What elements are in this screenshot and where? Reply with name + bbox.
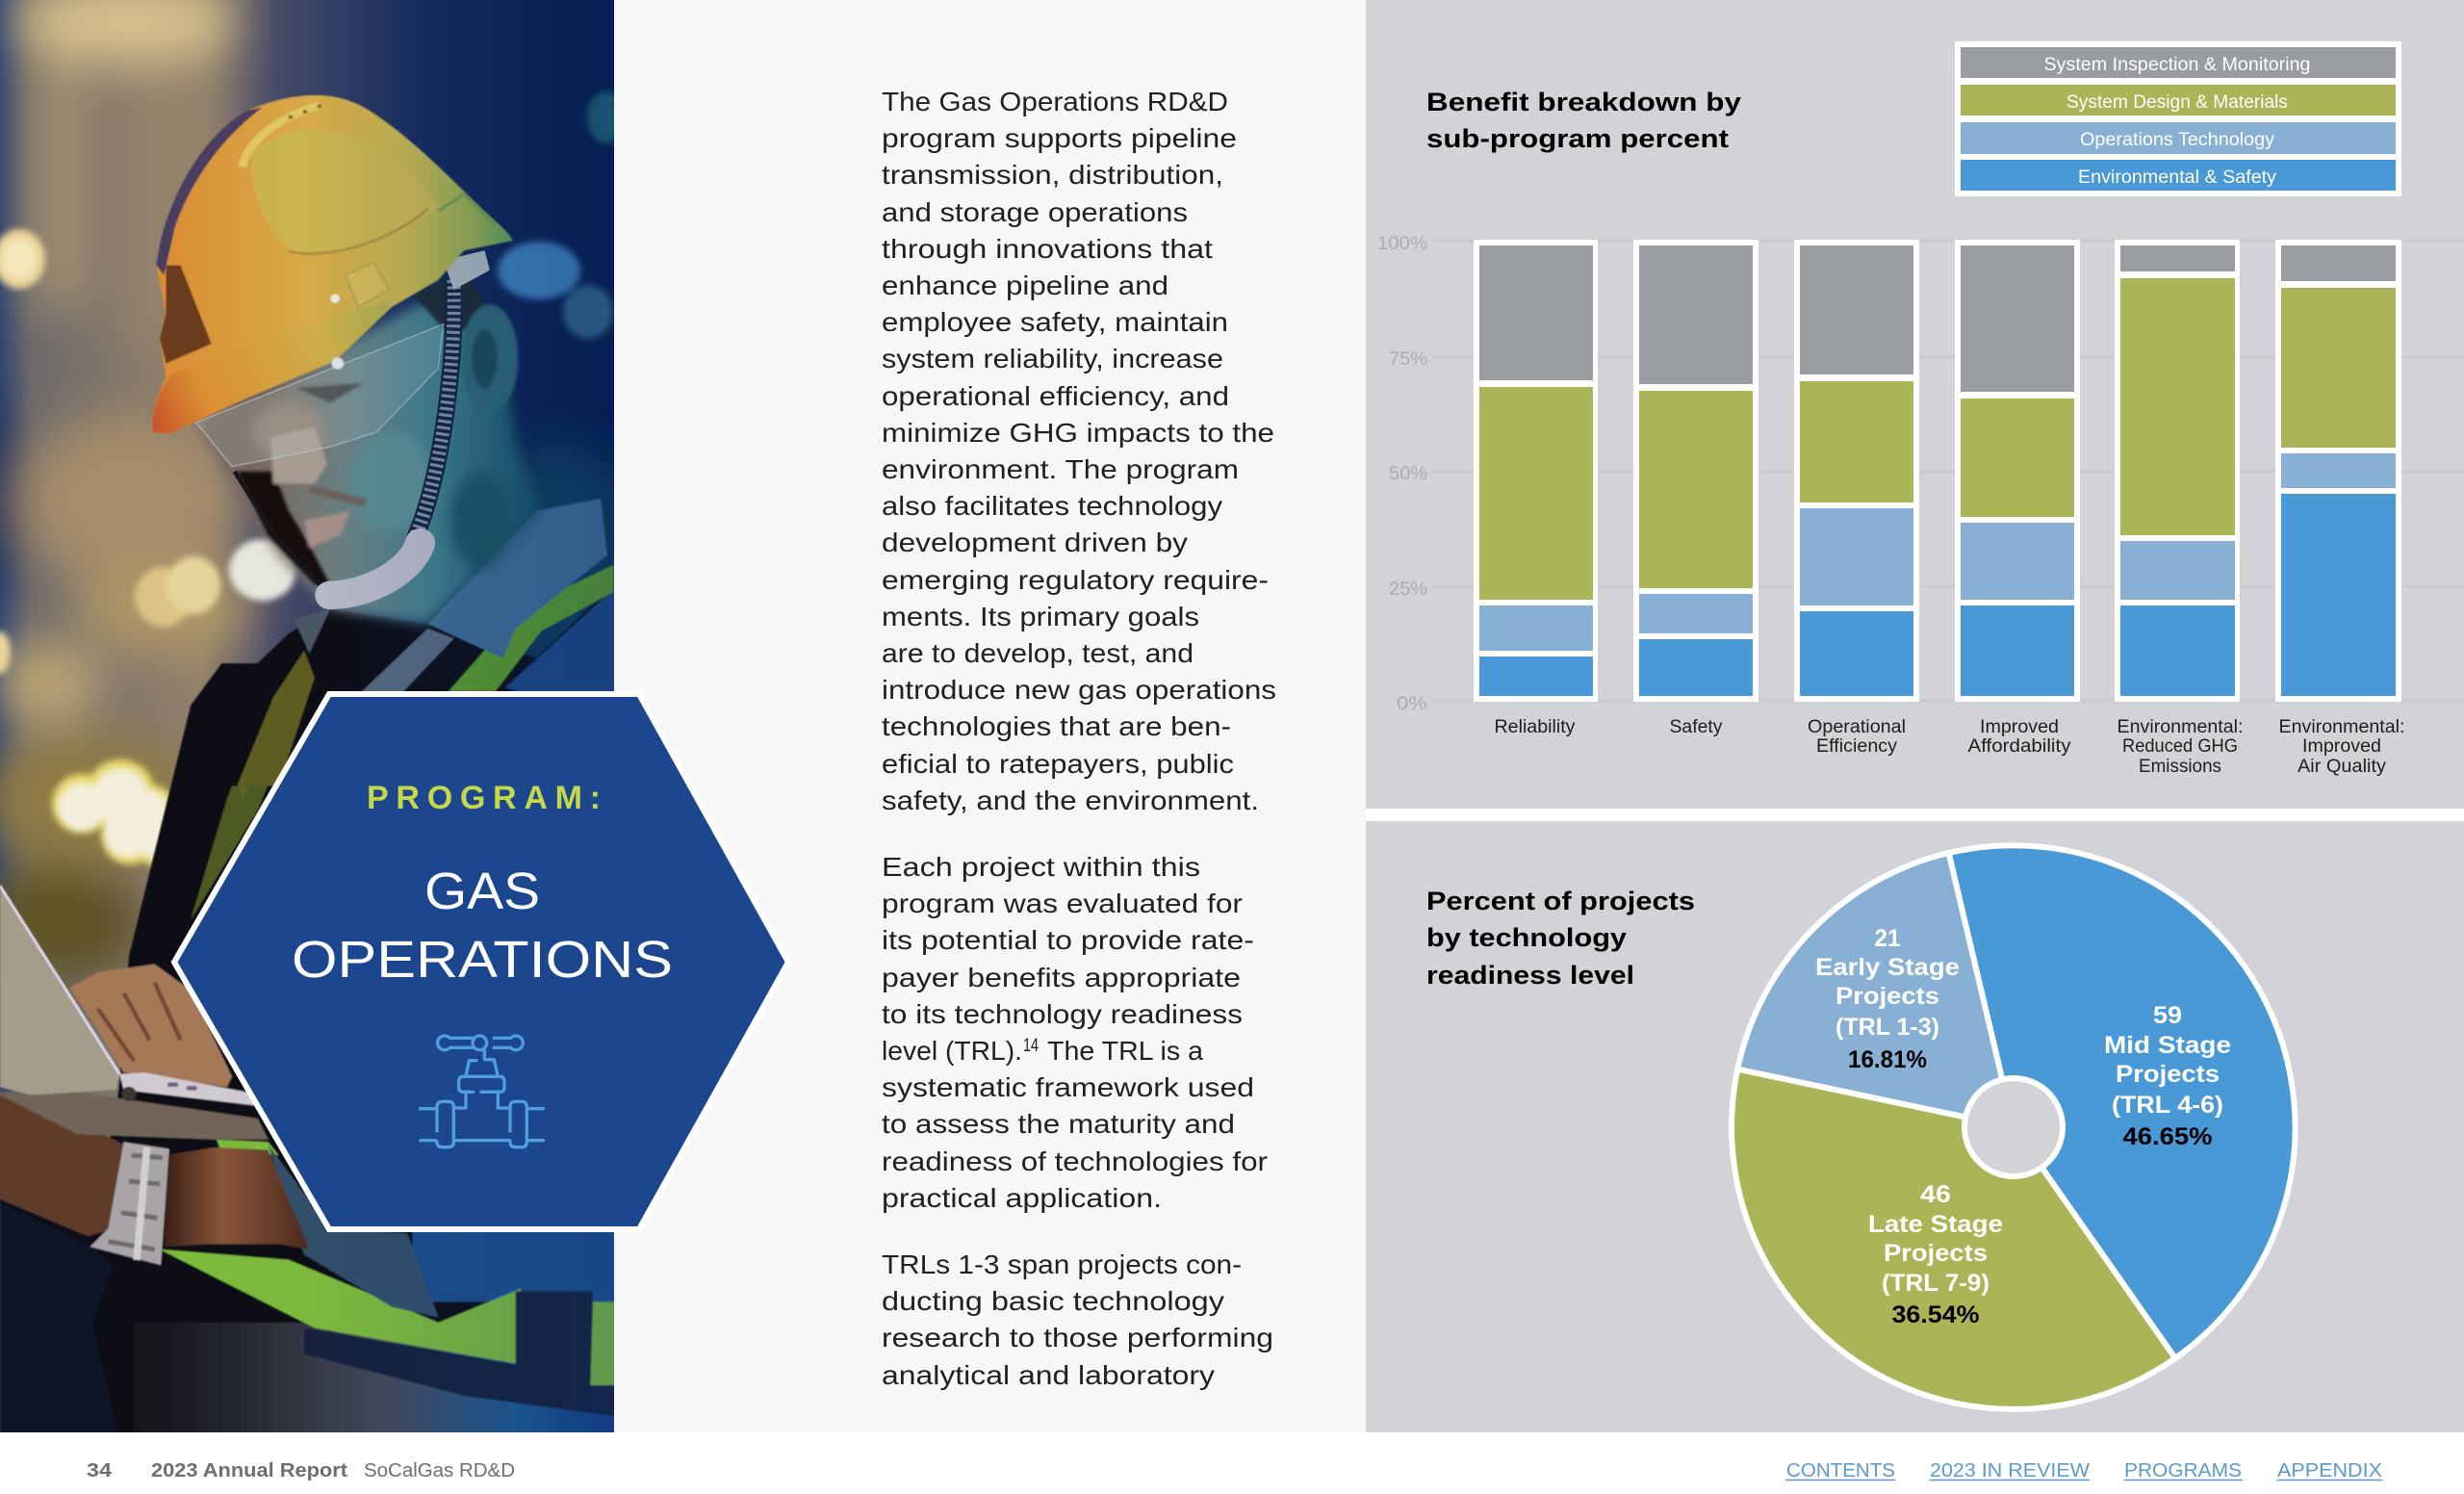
hexagon badge: program title: PROGRAM:: [367, 780, 601, 816]
body text: paragraph 1: program supports pipeline: [882, 123, 1237, 153]
body text: paragraph 2: payer benefits appropriate: [882, 963, 1241, 992]
body text: paragraph 2: to assess the maturity and: [882, 1109, 1235, 1139]
x axis labels: Reliability: [1494, 717, 1576, 737]
body text: paragraph 1: eficial to ratepayers, public: [882, 749, 1234, 779]
stacked bar chart: benefit by sub-program: [1377, 234, 2464, 777]
footer: page number and report name: 2023 Annual Report: [151, 1460, 347, 1481]
heading: percent of projects: [1426, 887, 1695, 990]
y axis labels: 50%: [1389, 464, 1427, 484]
legend: sub-programs: [1955, 41, 2401, 196]
donut label: late stage: [1868, 1181, 2003, 1328]
body text: paragraph 2: practical application.: [882, 1183, 1162, 1213]
donut label: late stage: 36.54%: [1892, 1301, 1979, 1328]
body text: paragraph 1: are to develop, test, and: [882, 638, 1194, 668]
donut label: late stage: 46: [1920, 1181, 1951, 1208]
legend: sub-programs: System Design & Materials: [2066, 92, 2288, 113]
photo detail: collar and shoulders: [178, 499, 619, 786]
footer: navigation links: APPENDIX: [2277, 1460, 2382, 1481]
body text: paragraph 1: employee safety, maintain: [882, 307, 1228, 337]
footer: navigation links: CONTENTS: [1786, 1460, 1895, 1481]
bar: Improved Affordability: [1955, 240, 2080, 702]
panel: technology readiness background: [1366, 821, 2464, 1432]
donut label: early stage: [1815, 925, 1960, 1073]
x axis labels: Environmental:: [2118, 717, 2243, 737]
body text: paragraph 1: through innovations that: [882, 234, 1213, 264]
x axis labels: Environmental:: [2279, 717, 2404, 737]
hexagon badge: program title: GAS: [424, 863, 540, 920]
y axis labels: 100%: [1377, 234, 1427, 254]
bar: Improved Air Quality: [2275, 240, 2401, 702]
donut label: early stage: (TRL 1-3): [1835, 1014, 1939, 1041]
donut label: early stage: 16.81%: [1848, 1046, 1927, 1073]
body text: paragraph 2: [882, 852, 1268, 1213]
body text: paragraph 2: its potential to provide rate-: [882, 925, 1254, 955]
bar: Operational Efficiency: [1794, 240, 1919, 702]
legend: sub-programs: System Inspection & Monitoring: [2044, 55, 2310, 75]
x axis labels: Improved: [2302, 736, 2381, 757]
heading: percent of projects: Percent of projects: [1426, 887, 1695, 915]
body text: paragraph 2: level (TRL).: [882, 1036, 1022, 1066]
body text: paragraph 1: [882, 87, 1276, 815]
body text: paragraph 2: 14: [1023, 1036, 1039, 1056]
body text: paragraph 1: also facilitates technology: [882, 491, 1222, 521]
legend: sub-programs: Environmental & Safety: [2078, 167, 2277, 188]
icon: pipeline valve: [421, 1036, 544, 1147]
donut label: mid stage: Mid Stage: [2104, 1032, 2231, 1059]
body text: paragraph 2: systematic framework used: [882, 1072, 1254, 1102]
body text: paragraph 3: TRLs 1-3 span projects con-: [882, 1249, 1242, 1279]
heading: benefit breakdown: Benefit breakdown by: [1426, 88, 1741, 116]
hexagon badge: program title: OPERATIONS: [292, 931, 673, 989]
x axis labels: Operational: [1808, 717, 1906, 737]
footer: page number and report name: 34: [87, 1460, 113, 1481]
bar: Safety: [1633, 240, 1758, 702]
panel: body text background: [614, 0, 1366, 1432]
photo detail: yellow hard hat: [152, 95, 513, 433]
donut label: late stage: Projects: [1884, 1240, 1988, 1267]
body text: paragraph 3: [882, 1249, 1273, 1390]
donut label: late stage: Late Stage: [1868, 1211, 2003, 1238]
y axis labels: [1377, 234, 1427, 714]
x axis labels: Safety: [1669, 717, 1723, 737]
body text: paragraph 2: readiness of technologies for: [882, 1146, 1268, 1176]
panel: benefit breakdown background: [1366, 0, 2464, 809]
footer: page number and report name: SoCalGas RD&D: [364, 1460, 515, 1481]
photo detail: lower body: [0, 663, 619, 1438]
body text: paragraph 1: operational efficiency, and: [882, 381, 1229, 411]
x axis labels: Reduced GHG: [2122, 736, 2238, 757]
heading: percent of projects: by technology: [1426, 923, 1627, 952]
body text: paragraph 1: The Gas Operations RD&D: [882, 87, 1228, 116]
donut label: early stage: Projects: [1835, 983, 1939, 1010]
donut chart: projects by technology readiness level: [1732, 845, 2296, 1409]
footer: navigation links: [1785, 1460, 2383, 1481]
body text: paragraph 1: environment. The program: [882, 454, 1239, 484]
body text: paragraph 1: enhance pipeline and: [882, 270, 1168, 300]
bar: Reduced GHG Emissions: [2115, 240, 2240, 702]
body text: paragraph 1: system reliability, increase: [882, 344, 1223, 374]
y axis labels: 0%: [1397, 694, 1427, 714]
heading: benefit breakdown: [1426, 88, 1741, 153]
body text: paragraph 2: Each project within this: [882, 852, 1200, 882]
donut label: mid stage: 46.65%: [2123, 1123, 2212, 1150]
photo: worker in hard hat using a laptop: [0, 0, 645, 1438]
donut label: mid stage: 59: [2153, 1002, 2182, 1029]
body text: paragraph 1: technologies that are ben-: [882, 711, 1231, 741]
body text: paragraph 2: program was evaluated for: [882, 889, 1243, 918]
body text: paragraph 1: emerging regulatory require-: [882, 565, 1269, 595]
heading: percent of projects: readiness level: [1426, 961, 1634, 990]
body text: paragraph 2: The TRL is a: [1047, 1036, 1203, 1066]
bar: Reliability: [1474, 240, 1598, 702]
body text: paragraph 3: analytical and laboratory: [882, 1360, 1215, 1390]
body text: paragraph 1: and storage operations: [882, 197, 1188, 227]
body text: paragraph 3: ducting basic technology: [882, 1286, 1224, 1316]
donut label: late stage: (TRL 7-9): [1882, 1270, 1989, 1297]
footer: page number and report name: [87, 1460, 515, 1481]
x axis labels: [1494, 717, 2404, 777]
body text: paragraph 1: introduce new gas operations: [882, 675, 1276, 705]
donut label: mid stage: [2104, 1002, 2231, 1150]
body text: paragraph 1: development driven by: [882, 528, 1188, 557]
footer: navigation links: 2023 IN REVIEW: [1930, 1460, 2090, 1481]
hexagon badge: program title: [174, 694, 788, 1229]
x axis labels: Emissions: [2139, 757, 2221, 777]
y axis labels: 25%: [1389, 580, 1427, 600]
donut label: mid stage: Projects: [2116, 1061, 2220, 1088]
x axis labels: Affordability: [1967, 736, 2071, 757]
body text: paragraph 2: to its technology readiness: [882, 999, 1243, 1029]
donut label: early stage: Early Stage: [1815, 954, 1960, 981]
x axis labels: Improved: [1980, 717, 2059, 737]
legend: sub-programs: Operations Technology: [2080, 130, 2275, 150]
footer: navigation links: PROGRAMS: [2124, 1460, 2242, 1481]
body text: paragraph 1: ments. Its primary goals: [882, 602, 1199, 631]
body text: paragraph 1: transmission, distribution,: [882, 160, 1223, 190]
body text: paragraph 3: research to those performing: [882, 1323, 1273, 1352]
body text: paragraph 1: minimize GHG impacts to the: [882, 418, 1274, 448]
y axis labels: 75%: [1389, 349, 1427, 370]
donut label: mid stage: (TRL 4-6): [2112, 1092, 2223, 1119]
heading: benefit breakdown: sub-program percent: [1426, 124, 1729, 153]
x axis labels: Air Quality: [2297, 757, 2387, 777]
donut label: early stage: 21: [1875, 925, 1901, 952]
body text: paragraph 1: safety, and the environment.: [882, 786, 1259, 815]
photo detail: head and face: [196, 250, 541, 624]
x axis labels: Efficiency: [1816, 736, 1898, 757]
